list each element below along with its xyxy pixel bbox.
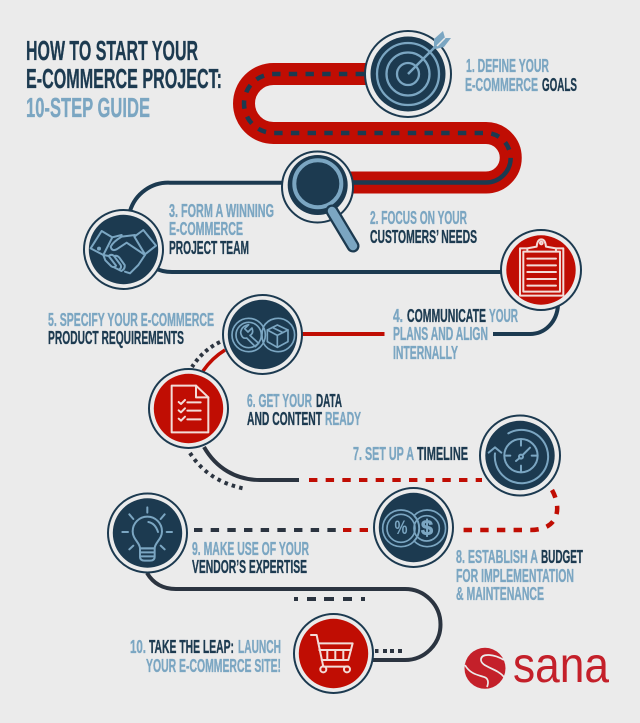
step 7 label: 7. SET UP A <box>353 444 414 464</box>
step 8: percent and dollar icon <box>374 488 453 567</box>
step 5: wrench and box icon <box>223 295 302 374</box>
step 4 label <box>393 306 518 363</box>
logo: sana: sana <box>513 637 609 693</box>
step 1 label <box>465 56 577 95</box>
step 9 label <box>192 539 309 577</box>
step 1 label: GOALS <box>542 75 577 95</box>
step 8 label <box>456 547 583 604</box>
step 6 label: READY <box>325 409 361 429</box>
step 3: handshake icon <box>84 210 163 289</box>
step 2 label: 2. FOCUS ON YOUR <box>370 208 467 228</box>
step 4 label: 4. <box>393 306 403 326</box>
step 4 label: COMMUNICATE <box>407 306 486 326</box>
connector: step 5 red line <box>302 332 384 336</box>
step 6 label: 6. GET YOUR <box>247 391 312 411</box>
step 9: light bulb icon <box>108 494 187 572</box>
step 1: target icon <box>365 31 451 117</box>
step 7: stopwatch icon <box>480 416 560 496</box>
step 9 label: 9. MAKE USE OF YOUR <box>192 539 309 559</box>
connector: step 6 to step 7 <box>190 447 482 489</box>
title <box>26 35 222 123</box>
step 4: clipboard icon <box>501 230 581 310</box>
step 6 label: AND CONTENT <box>247 409 322 429</box>
step 5 label: 5. SPECIFY YOUR E-COMMERCE <box>48 310 214 330</box>
connector: step 3 to step 4 <box>155 268 502 272</box>
step 10 label: LAUNCH <box>238 637 281 657</box>
connector: step 7 to step 8 <box>456 490 557 530</box>
step 5 label <box>48 310 214 348</box>
step 3 label: 3. FORM A WINNING <box>169 201 274 221</box>
step 1 label: 1. DEFINE YOUR <box>466 56 549 76</box>
step 2: magnifier icon <box>282 152 353 246</box>
connector: step 2 to step 3 <box>130 183 285 211</box>
step 6 label: DATA <box>316 391 342 411</box>
connector: step 4 to text <box>493 305 558 334</box>
step 8 label: & MAINTENANCE <box>456 584 544 604</box>
step 10 label <box>130 637 281 676</box>
title: E-COMMERCE PROJECT: <box>26 63 222 94</box>
step 6: document checklist icon <box>149 369 228 448</box>
step 4 label: PLANS AND ALIGN <box>393 324 488 344</box>
connector: step 8 to step 9 <box>194 528 368 532</box>
step 5 label: PRODUCT REQUIREMENTS <box>48 328 184 348</box>
step 3 label: E-COMMERCE <box>169 219 243 239</box>
step 4 label: YOUR <box>489 306 518 326</box>
step 8 label: 8. ESTABLISH A <box>456 547 538 567</box>
step 3 label <box>169 201 274 258</box>
step 10 label: YOUR E-COMMERCE SITE! <box>146 656 281 676</box>
step 7 label: TIMELINE <box>417 444 468 464</box>
step 10: shopping cart icon <box>294 614 373 693</box>
step 8 label: BUDGET <box>541 547 583 567</box>
connector: step 9 to step 10 <box>147 573 440 660</box>
red road from step 1 to step 2 <box>244 74 511 182</box>
step 8: percent and dollar icon: % <box>394 518 408 539</box>
title: HOW TO START YOUR <box>26 35 198 66</box>
title: 10-STEP GUIDE <box>26 92 150 123</box>
connector: step 5 to step 6 <box>192 342 225 371</box>
step 8: percent and dollar icon: $ <box>421 517 433 540</box>
step 4 label: INTERNALLY <box>393 343 458 363</box>
step 2 label: CUSTOMERS’ NEEDS <box>370 227 477 247</box>
step 3 label: PROJECT TEAM <box>169 238 249 258</box>
logo: sana <box>464 637 609 693</box>
step 1 label: E-COMMERCE <box>465 75 538 95</box>
step 9 label: VENDOR’S EXPERTISE <box>192 557 307 577</box>
step 6 label <box>247 391 361 429</box>
step 10 label: TAKE THE LEAP: <box>149 637 234 657</box>
step 2 label <box>370 208 477 247</box>
step 10 label: 10. <box>130 637 146 657</box>
